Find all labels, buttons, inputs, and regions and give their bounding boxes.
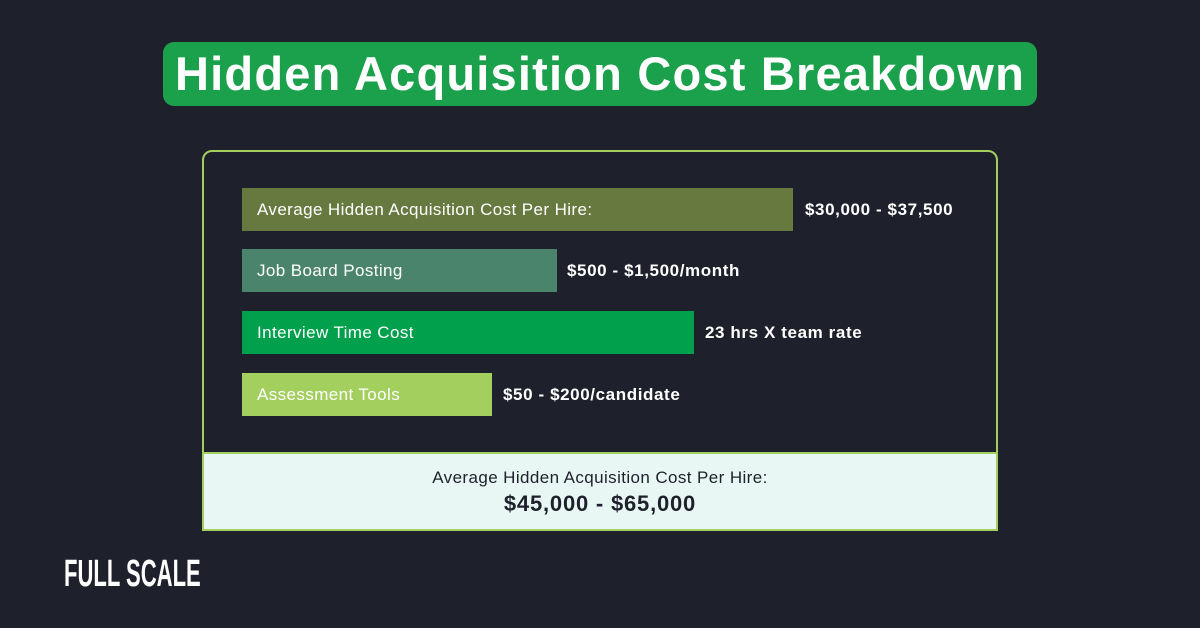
bar: assessment tools [242, 373, 492, 416]
value: average hidden cost: $30,000 - $37,500 [805, 200, 953, 219]
value: assessment: $50 - $200/candidate [503, 385, 680, 404]
panel: cost breakdown [202, 150, 998, 531]
summary box: $45,000 - $65,000 [504, 491, 696, 516]
bar: average hidden cost: Average Hidden Acquisition Cost Per Hire: [257, 200, 592, 219]
bar: average hidden cost [242, 188, 793, 231]
bar: interview time cost: Interview Time Cost [257, 323, 414, 342]
summary box [202, 452, 998, 531]
value: interview: 23 hrs X team rate [705, 323, 862, 342]
summary box: Average Hidden Acquisition Cost Per Hire: [432, 468, 768, 487]
logo: FULL SCALE [64, 553, 201, 595]
value: job board: $500 - $1,500/month [567, 261, 740, 280]
bar: job board posting: Job Board Posting [257, 261, 403, 280]
bar: interview time cost [242, 311, 694, 354]
bar: assessment tools: Assessment Tools [257, 385, 400, 404]
title: Hidden Acquisition Cost Breakdown [175, 47, 1025, 100]
bar: job board posting [242, 249, 557, 292]
